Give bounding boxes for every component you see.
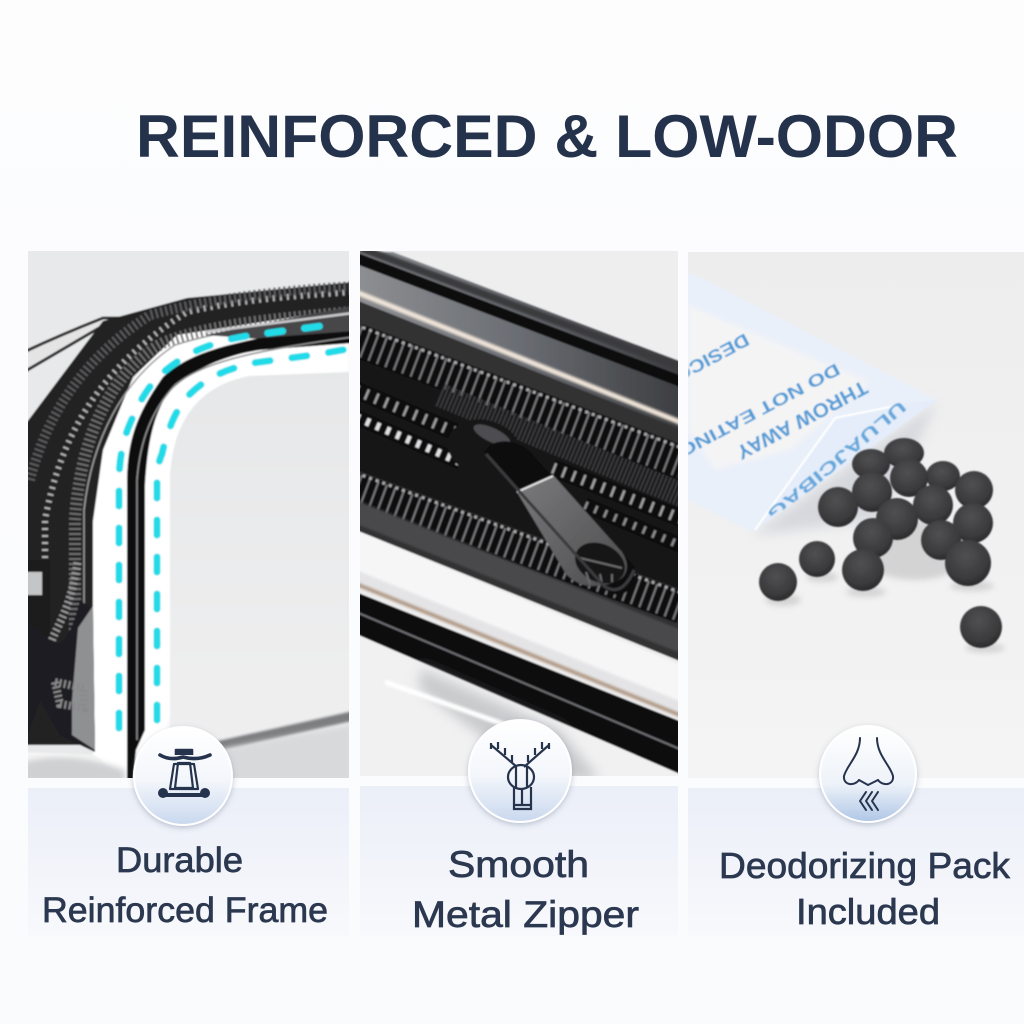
label: smooth: Smooth [448,844,589,885]
icon: frame stand badge [134,727,232,825]
label: reinforced frame: Reinforced Frame [42,891,328,930]
icon: nose badge [820,726,916,822]
label: deodorizing pack: Deodorizing Pack [719,845,1011,886]
grey seam lines near top edge [205,306,353,339]
woven tape [440,395,682,495]
upper zipper tape teeth [356,340,682,463]
sachet text: garbled line: ULUAJCIBAG [763,397,910,524]
sachet text: desiccant: DESICCANT [633,329,753,406]
black bead [127,331,353,782]
title: REINFORCED & LOW-ODOR [136,103,958,170]
cyan dashed stitch lines [119,324,348,728]
panel: metal zipper photo [356,247,682,780]
card: deodorizing pack included [688,788,1024,936]
charcoal balls shadows [765,520,1005,653]
panel: reinforced frame photo [24,247,353,782]
card: durable reinforced frame [28,788,349,936]
sachet text: throw away: THROW AWAY [732,376,871,463]
label: metal zipper: Metal Zipper [412,894,639,935]
zipper band [24,282,353,752]
lower zipper tape teeth [356,488,682,608]
zipper slider and pull tab [441,411,635,595]
desiccant sachet [688,274,936,531]
label: durable: Durable [116,841,243,880]
panel: deodorizing pack photo [688,252,1024,778]
charcoal balls [759,438,1002,648]
label: included: Included [796,891,940,932]
coil teeth [356,390,682,546]
lower black bead [356,592,682,775]
icon: zipper badge [469,720,571,822]
sachet text: do not eat: DO NOT EATING [675,359,843,461]
white clear vinyl band [356,531,682,716]
card: smooth metal zipper [360,786,678,936]
